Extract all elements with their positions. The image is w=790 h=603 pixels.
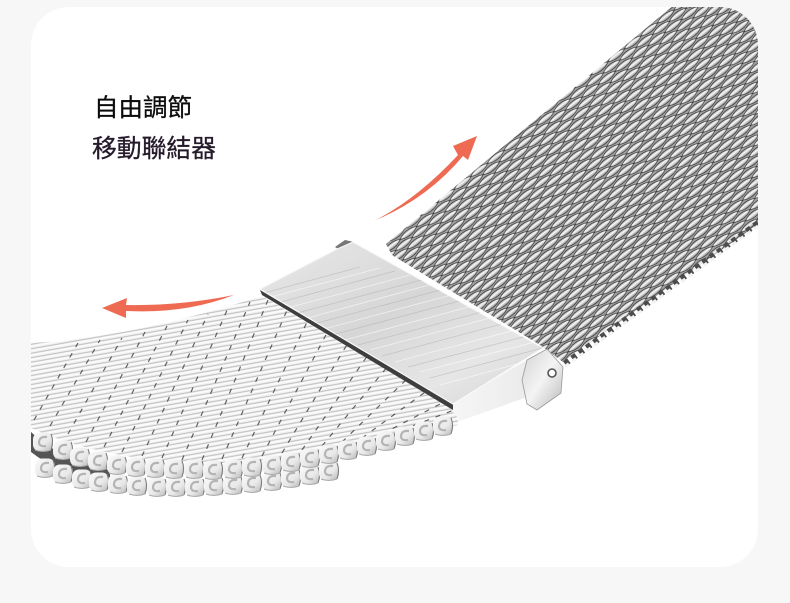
heading: free adjustment: 自由調節 [94, 95, 192, 122]
clasp: sliding connector [260, 240, 550, 421]
left mesh band [31, 296, 458, 463]
right mesh band [386, 0, 758, 368]
text block: movable connector: 移動聯結器 [92, 136, 216, 163]
arrow: up right [376, 136, 477, 220]
clasp hinge [522, 349, 563, 410]
link chain edge of folded strap [31, 416, 453, 496]
arrow: left [102, 295, 234, 318]
